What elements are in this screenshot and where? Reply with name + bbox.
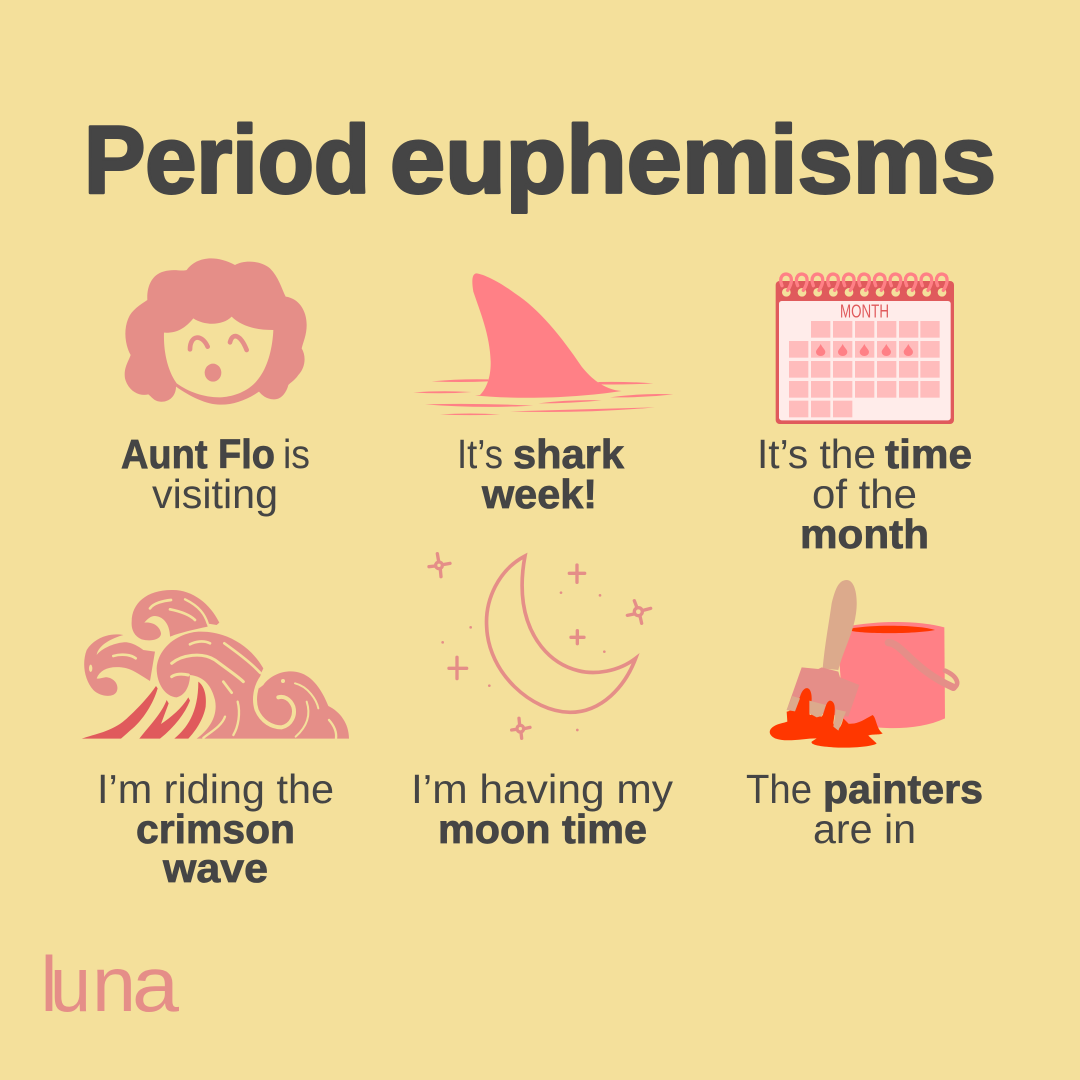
- label: It's the time of the month: [757, 431, 972, 557]
- icon: crescent moon and stars: [429, 554, 651, 738]
- label: Aunt Flo is visiting: [121, 431, 310, 517]
- label: It's the time of the month: time: [885, 431, 972, 477]
- label: Aunt Flo is visiting: visiting: [152, 471, 278, 517]
- logo: luna: a: [132, 940, 180, 1028]
- icon: crimson wave: [82, 590, 349, 739]
- logo: luna: l: [40, 940, 58, 1028]
- label: I'm riding the crimson wave: [97, 766, 334, 891]
- label: I'm having my moon time: [411, 766, 674, 852]
- title: [84, 106, 996, 214]
- label: It's the time of the month: of the: [812, 471, 917, 517]
- label: It's shark week!: week!: [481, 471, 597, 517]
- label: The painters are in: [746, 766, 983, 852]
- logo: luna: n: [92, 940, 136, 1028]
- label: It's the time of the month: It’s the: [757, 431, 876, 477]
- label: It's shark week!: [457, 431, 624, 517]
- icon: calendar with blood drops: MONTH: [840, 301, 889, 322]
- icon: Aunt Flo face with curly hair: [125, 258, 307, 405]
- logo: luna: u: [50, 940, 91, 1028]
- label: It's the time of the month: month: [800, 511, 929, 557]
- label: I'm having my moon time: I’m having my: [411, 766, 674, 812]
- label: I'm riding the crimson wave: wave: [162, 845, 268, 891]
- label: It's shark week!: It’s: [457, 431, 503, 477]
- label: Aunt Flo is visiting: is: [283, 431, 310, 477]
- label: The painters are in: painters: [823, 766, 983, 812]
- icon: paint bucket and brush: [770, 580, 957, 748]
- icon: shark fin: [413, 273, 673, 415]
- icon: calendar with blood drops: [776, 274, 954, 424]
- title: Period: [84, 106, 370, 214]
- label: The painters are in: are in: [813, 806, 916, 852]
- label: I'm riding the crimson wave: crimson: [136, 806, 295, 852]
- label: I'm having my moon time: moon time: [438, 806, 647, 852]
- label: Aunt Flo is visiting: Aunt Flo: [121, 431, 275, 477]
- label: The painters are in: The: [746, 766, 812, 812]
- label: I'm riding the crimson wave: I’m riding the: [97, 766, 334, 812]
- label: It's shark week!: shark: [513, 431, 624, 477]
- logo: luna: [40, 940, 180, 1028]
- title: euphemisms: [390, 106, 996, 214]
